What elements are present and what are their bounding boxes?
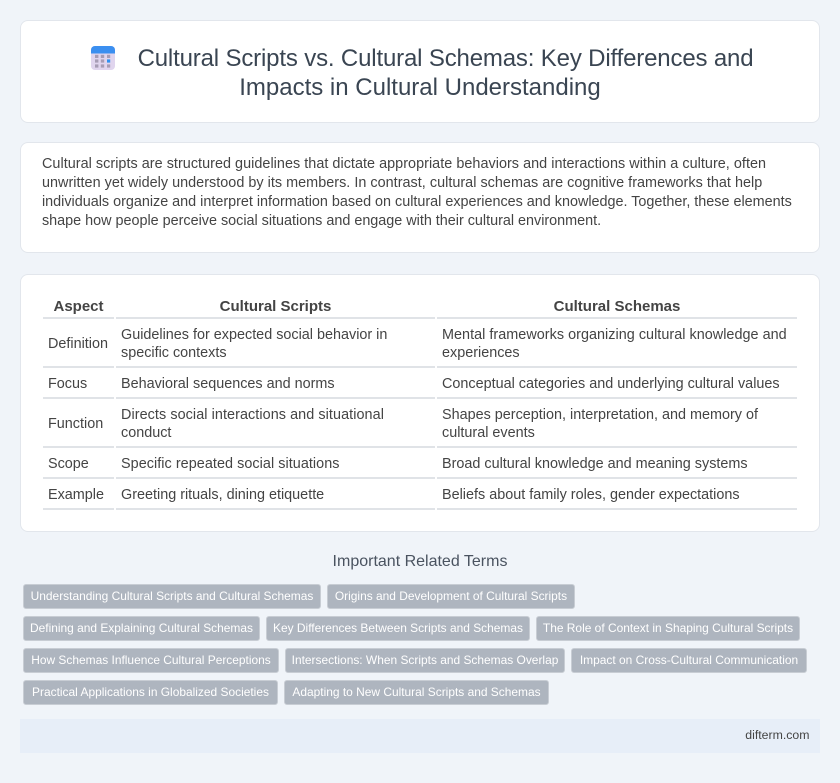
row: scope — [43, 456, 797, 479]
table header row: Aspect — [53, 298, 104, 315]
related terms tags: Understanding Cultural Scripts and Cultural Schemas — [31, 589, 313, 603]
row: definition: experiences — [442, 345, 520, 361]
intro text: shape how people perceive social situations and engage with their cultural environment. — [42, 213, 601, 229]
related terms tags: Practical Applications in Globalized Societies — [32, 685, 269, 699]
row: function: cultural events — [442, 425, 535, 441]
row: example: Greeting rituals, dining etiquette — [121, 487, 324, 503]
intro text: Cultural scripts are structured guidelines that dictate appropriate behaviors and interactions within a culture, often — [42, 156, 766, 172]
related terms tags: Intersections: When Scripts and Schemas Overlap — [292, 653, 558, 667]
comparison table panel — [20, 274, 820, 532]
title: Impacts in Cultural Understanding — [239, 74, 601, 101]
title — [138, 45, 753, 101]
icon: calendar — [91, 46, 115, 70]
footer brand: difterm.com — [745, 728, 810, 742]
row: function: conduct — [121, 425, 171, 441]
related terms tags: How Schemas Influence Cultural Perceptions — [31, 653, 271, 667]
row: example: Beliefs about family roles, gender expectations — [442, 487, 740, 503]
row: scope: Specific repeated social situations — [121, 456, 340, 472]
related terms tags: Defining and Explaining Cultural Schemas — [30, 621, 253, 635]
row: definition: Definition — [48, 336, 108, 352]
row: function: Directs social interactions and situational — [121, 407, 384, 423]
row: focus: Focus — [48, 376, 87, 392]
related terms tags: Adapting to New Cultural Scripts and Schemas — [292, 685, 541, 699]
intro text: individuals organize and interpret information based on cultural experiences and knowledge. Together, these elements — [42, 194, 792, 210]
row: focus: Conceptual categories and underlying cultural values — [442, 376, 780, 392]
intro panel — [20, 142, 820, 253]
footer bar — [20, 719, 820, 753]
table header row: Cultural Scripts — [220, 298, 331, 315]
title: Cultural Scripts vs. Cultural Schemas: Key Differences and — [138, 45, 753, 72]
row: example: Example — [48, 487, 104, 503]
row: focus — [43, 376, 797, 399]
table header row: Cultural Schemas — [554, 298, 680, 315]
row: example — [43, 487, 797, 510]
row: function: Function — [48, 416, 103, 432]
intro text: unwritten yet widely understood by its members. In contrast, cultural schemas are cognitive frameworks that help — [42, 175, 762, 191]
row: function: Shapes perception, interpretation, and memory of — [442, 407, 758, 423]
related terms tags: Impact on Cross-Cultural Communication — [580, 653, 798, 667]
row: scope: Broad cultural knowledge and meaning systems — [442, 456, 748, 472]
related terms tags: Key Differences Between Scripts and Schemas — [273, 621, 523, 635]
row: definition — [43, 327, 797, 368]
comparison table — [43, 298, 797, 510]
row: definition: specific contexts — [121, 345, 227, 361]
related terms heading: Important Related Terms — [333, 553, 507, 570]
row: function — [43, 407, 797, 448]
row: focus: Behavioral sequences and norms — [121, 376, 335, 392]
row: scope: Scope — [48, 456, 89, 472]
related terms tags: The Role of Context in Shaping Cultural Scripts — [543, 621, 793, 635]
row: definition: Guidelines for expected social behavior in — [121, 327, 387, 343]
header panel — [20, 20, 820, 123]
intro text — [42, 156, 792, 229]
related terms tags — [23, 584, 807, 705]
related terms tags: Origins and Development of Cultural Scripts — [335, 589, 567, 603]
row: definition: Mental frameworks organizing cultural knowledge and — [442, 327, 787, 343]
table header row — [43, 298, 797, 319]
